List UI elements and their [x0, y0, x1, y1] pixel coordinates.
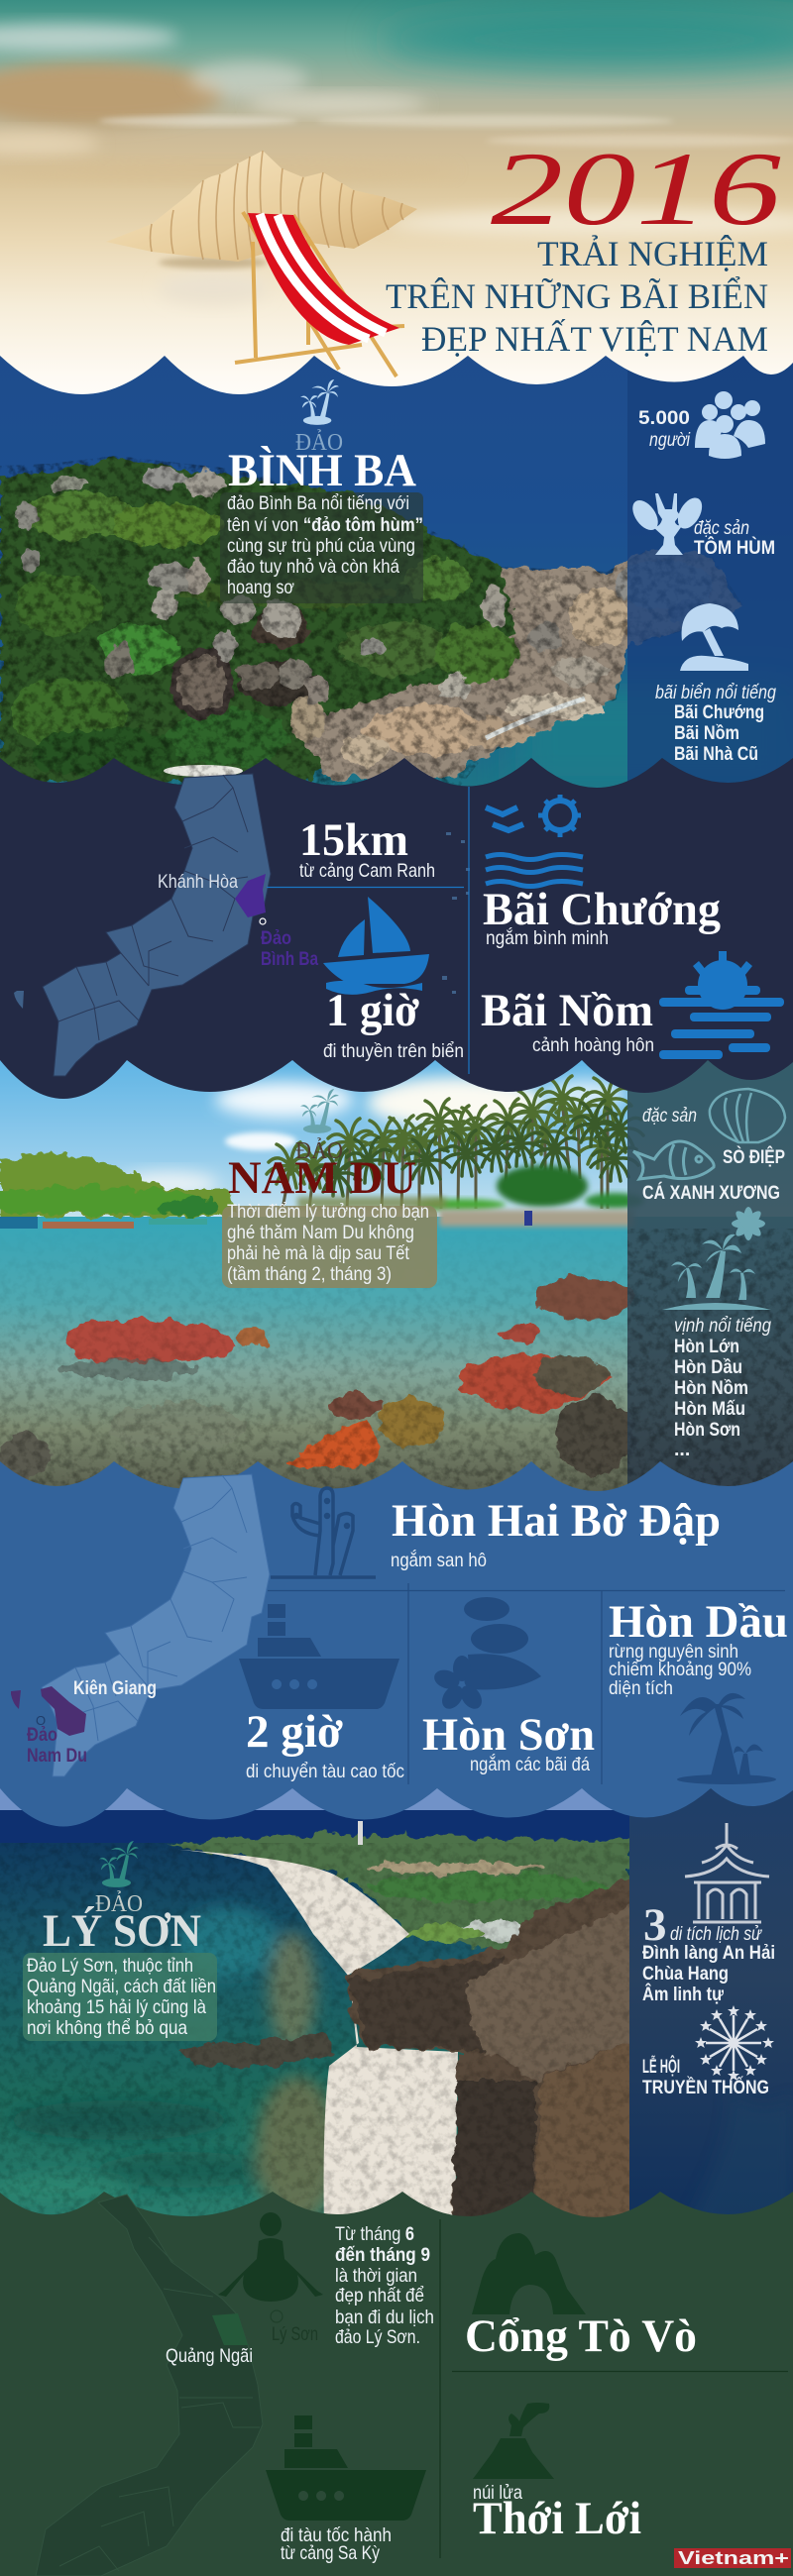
text block: intro: phải hè mà là dịp sau Tết: [227, 1242, 409, 1264]
logo: Vietnam+: [674, 2548, 791, 2568]
map: Kiên Giang: [11, 1474, 270, 1776]
island header: Lý Sơn: [27, 1841, 216, 2039]
text block: intro: khoảng 15 hải lý cũng là: [27, 1996, 206, 2018]
text block: ferry: từ cảng Sa Kỳ: [281, 2542, 380, 2564]
text block: intro: Quảng Ngãi, cách đất liền: [27, 1976, 216, 1997]
label: island on map: Bình Ba: [261, 948, 318, 970]
island header: Nam Du: [227, 1089, 429, 1285]
panel: Lý Sơn travel info: [0, 2192, 793, 2576]
photo panel: Lý Sơn island: [0, 1773, 793, 2234]
label: sunset viewing: cảnh hoàng hôn: [532, 1034, 654, 1056]
text box backing: [23, 1953, 217, 2041]
title: [386, 131, 781, 359]
icon: beach chair: [235, 212, 404, 376]
list: relics: Đình làng An Hải: [642, 1942, 775, 1964]
stat: three relics: 3: [643, 1899, 666, 1951]
sidebar content: Bình Ba: [627, 391, 776, 765]
list: relics: [642, 1942, 775, 2005]
icon: conch shell: [106, 151, 417, 262]
icon: palm island: [662, 1234, 771, 1310]
heading: Lý Sơn: LÝ SƠN: [43, 1905, 201, 1957]
text block: best time: Từ tháng 6: [335, 2223, 414, 2245]
text block: intro: [227, 1201, 429, 1285]
map: Quảng Ngãi: [36, 2195, 263, 2576]
icon: ship: [239, 1604, 399, 1709]
text block: intro: đảo tuy nhỏ và còn khá: [227, 556, 399, 578]
text block: best time: đẹp nhất để: [335, 2285, 424, 2307]
icon: palm island: [300, 1089, 339, 1133]
label: province: Kiên Giang: [73, 1677, 157, 1699]
map marker: Lý Sơn: [271, 2310, 318, 2345]
icon: palm island: [300, 379, 339, 425]
list: bays: Hòn Dầu: [674, 1356, 742, 1378]
specialty name: TÔM HÙM: [694, 535, 775, 559]
icon: people: [695, 391, 765, 459]
icon: sailboat: [323, 897, 429, 995]
label: specialty: đặc sản: [694, 517, 749, 539]
label: distance: từ cảng Cam Ranh: [299, 860, 435, 882]
icon: palm island: [99, 1841, 139, 1887]
title: heading lines: ĐẸP NHẤT VIỆT NAM: [421, 319, 768, 359]
text block: forest: [609, 1641, 751, 1699]
text block: intro: [227, 492, 423, 598]
icon: coral: [271, 1488, 376, 1577]
label: volcano: núi lửa: [473, 2482, 522, 2504]
icon: fish: [633, 1141, 714, 1179]
icon: sunrise over waves: [486, 795, 584, 886]
label: đảo: ĐẢO: [295, 1138, 343, 1164]
text block: intro: ghé thăm Nam Du không: [227, 1222, 414, 1243]
panel: Bình Ba travel info: [0, 758, 793, 1099]
heading: Bình Ba: BÌNH BA: [228, 445, 416, 496]
label: coral viewing: ngắm san hô: [391, 1549, 487, 1571]
label: island on map: Đảo: [27, 1724, 57, 1746]
icon: person rowing: [218, 2212, 323, 2302]
logo: Vietnam+: Vietnam+: [678, 2548, 789, 2568]
label: travel time: di chuyển tàu cao tốc: [246, 1761, 404, 1782]
list: beaches: Bãi Nồm: [674, 722, 739, 744]
label: island on map: [27, 1713, 87, 1767]
list: relics: Chùa Hang: [642, 1963, 729, 1985]
icon: scallop: [710, 1089, 785, 1142]
text box backing: [222, 1206, 437, 1288]
heading: Hòn Dầu: Hòn Dầu: [609, 1596, 788, 1648]
heading: Bãi Nồm: Bãi Nồm: [481, 985, 653, 1036]
title: heading lines: [386, 234, 768, 359]
text block: intro: [27, 1955, 216, 2039]
text block: forest: diện tích: [609, 1677, 673, 1699]
text block: intro: Thời điểm lý tưởng cho bạn: [227, 1201, 429, 1223]
stat: travel time: 1 giờ: [326, 985, 419, 1036]
text block: intro: đảo Bình Ba nổi tiếng với: [227, 492, 409, 514]
heading: Hòn Hai Bờ Đập: Hòn Hai Bờ Đập: [392, 1495, 721, 1547]
label: festival: TRUYỀN THỐNG: [642, 2075, 769, 2098]
list: bays: Hòn Mấu: [674, 1398, 745, 1420]
title: heading lines: TRẢI NGHIỆM: [537, 234, 768, 273]
sidebar: Nam Du facts: [627, 1050, 793, 1496]
list: bays: Hòn Lớn: [674, 1336, 739, 1357]
sidebar: Bình Ba facts: [627, 357, 793, 793]
icon: temple: [685, 1823, 769, 1922]
island header: Bình Ba: [227, 379, 423, 598]
label: specialty: đặc sản: [642, 1105, 697, 1127]
text block: intro: cùng sự trù phú của vùng: [227, 535, 415, 557]
label: island on map: Đảo: [261, 927, 291, 949]
text block: best time: bạn đi du lịch: [335, 2307, 434, 2328]
label: island on map: O: [36, 1713, 46, 1728]
text block: intro: Đảo Lý Sơn, thuộc tỉnh: [27, 1955, 193, 1977]
list: bays: ...: [674, 1439, 690, 1460]
icon: ship: [266, 2415, 426, 2521]
stat: travel time: 2 giờ: [246, 1706, 343, 1758]
photo: beach with sand and waves: [0, 0, 793, 426]
label: island on map: Nam Du: [27, 1745, 87, 1767]
text block: intro: tên ví von “đảo tôm hùm”: [227, 514, 423, 536]
stat: distance: 15km: [299, 814, 408, 866]
label: festival: [642, 2054, 769, 2098]
text block: best time: đảo Lý Sơn.: [335, 2326, 420, 2348]
label: people: người: [649, 429, 691, 451]
list: bays: [674, 1336, 748, 1460]
label: travel time: đi thuyền trên biển: [323, 1040, 464, 1062]
icon: flower: [732, 1207, 765, 1240]
sidebar content: Nam Du: [633, 1089, 785, 1460]
icon: arch gate: [472, 2233, 586, 2314]
photo panel: Bình Ba island: [0, 337, 793, 793]
icon: lobster: [627, 493, 707, 555]
label: famous bays: vịnh nổi tiếng: [674, 1315, 771, 1337]
text block: forest: rừng nguyên sinh: [609, 1641, 738, 1663]
panel: Nam Du travel info: [0, 1461, 793, 1827]
text block: best time: [335, 2223, 434, 2348]
heading: Thới Lới: Thới Lới: [473, 2493, 641, 2544]
list: beaches: [674, 701, 764, 765]
sidebar: Lý Sơn facts: [629, 1773, 793, 2229]
text block: ferry: đi tàu tốc hành: [281, 2524, 392, 2546]
heading: Bãi Chướng: Bãi Chướng: [483, 884, 721, 935]
sidebar content: Lý Sơn: [642, 1823, 775, 2098]
list: beaches: Bãi Nhà Cũ: [674, 743, 758, 765]
label: island on map: [261, 927, 318, 970]
label: đảo: ĐẢO: [295, 430, 343, 456]
label: festival: LỄ HỘI: [642, 2054, 680, 2078]
title: heading lines: TRÊN NHỮNG BÃI BIỂN: [386, 276, 768, 316]
map: Khánh Hòa: [14, 774, 470, 1076]
label: province: Khánh Hòa: [158, 871, 238, 893]
icon: sunset: [659, 951, 784, 1059]
title: year: 2016: [491, 131, 781, 247]
icon: fireworks: [695, 2005, 774, 2081]
list: relics: Âm linh tự: [642, 1982, 725, 2005]
photo panel: Nam Du island: [0, 1050, 793, 1499]
heading: Hòn Sơn: Hòn Sơn: [422, 1709, 595, 1761]
text block: ferry: [281, 2524, 392, 2564]
text block: intro: nơi không thể bỏ qua: [27, 2017, 187, 2039]
label: sunrise viewing: ngắm bình minh: [486, 926, 609, 949]
text block: intro: (tầm tháng 2, tháng 3): [227, 1263, 392, 1285]
heading: Cổng Tò Vò: Cổng Tò Vò: [465, 2310, 697, 2362]
icon: umbrella: [680, 603, 748, 671]
label: đảo: ĐẢO: [95, 1891, 143, 1917]
text block: best time: đến tháng 9: [335, 2244, 430, 2266]
icon: stones and flower: [432, 1597, 541, 1713]
list: beaches: Bãi Chướng: [674, 701, 764, 723]
stat: population: 5.000: [638, 407, 690, 429]
label: relics: di tích lịch sử: [670, 1923, 762, 1945]
label: stone beaches: ngắm các bãi đá: [470, 1753, 590, 1775]
list: bays: Hòn Sơn: [674, 1419, 740, 1441]
text block: intro: hoang sơ: [227, 577, 294, 598]
label: province: Quảng Ngãi: [166, 2345, 253, 2367]
map marker: Lý Sơn: Lý Sơn: [272, 2323, 318, 2345]
list: bays: Hòn Nồm: [674, 1377, 748, 1399]
icon: palm trees: [677, 1693, 776, 1784]
text block: best time: là thời gian: [335, 2265, 417, 2287]
icon: volcano: [473, 2403, 554, 2479]
text box backing: [220, 492, 423, 603]
heading: Nam Du: NAM DU: [228, 1152, 416, 1204]
text block: forest: chiếm khoảng 90%: [609, 1659, 751, 1680]
